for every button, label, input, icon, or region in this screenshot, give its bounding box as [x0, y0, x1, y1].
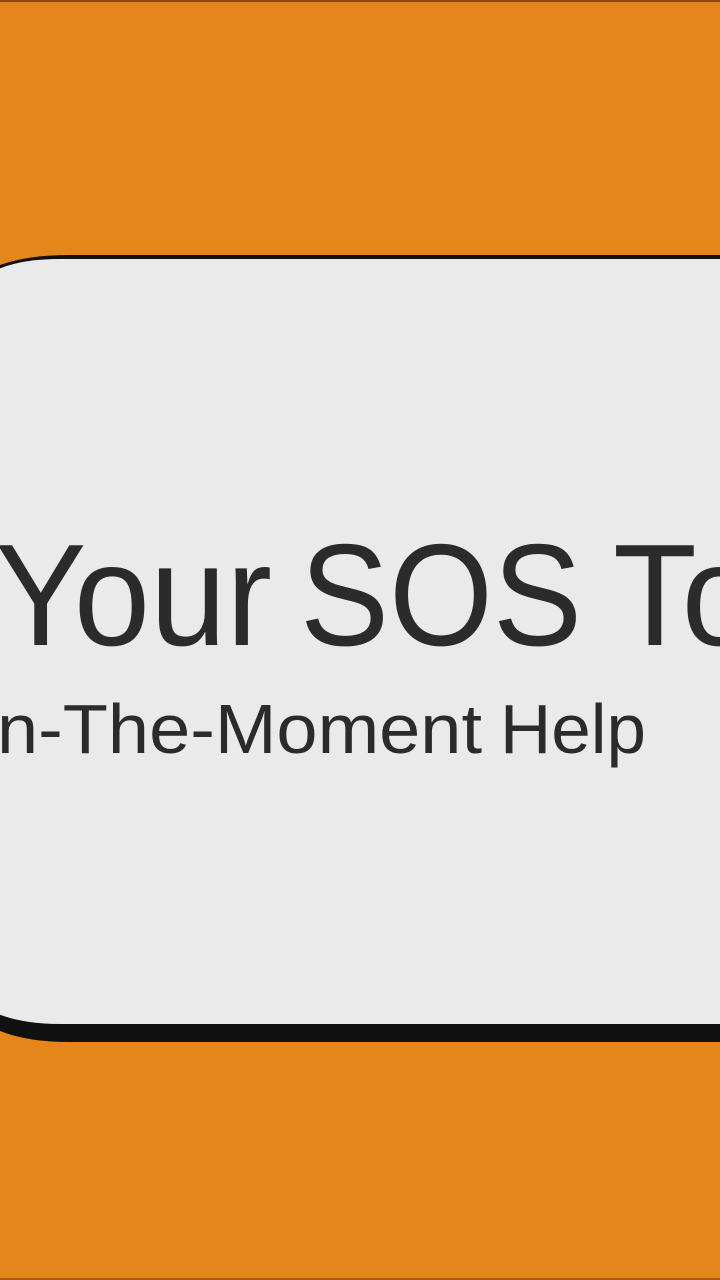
subheading: n-The-Moment	[0, 690, 482, 768]
panel: title card	[0, 255, 720, 1042]
subheading: Help	[500, 690, 646, 768]
heading	[0, 514, 720, 676]
card shadow border	[0, 255, 720, 1042]
heading: SOS	[300, 514, 582, 676]
card face	[0, 259, 720, 1024]
heading: Your	[0, 514, 272, 676]
